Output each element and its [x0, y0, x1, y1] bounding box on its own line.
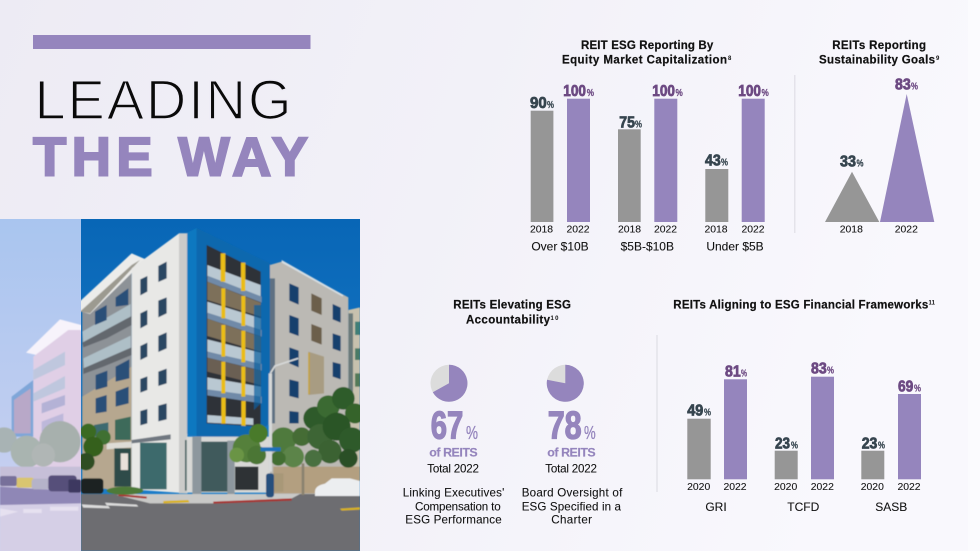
category labels: [531, 240, 764, 254]
year labels: 2020: [687, 482, 710, 493]
pie: 78 percent: [547, 365, 584, 402]
main photo: [72, 219, 365, 551]
value labels: 100: [738, 83, 761, 100]
far right building: [348, 307, 360, 497]
balcony floors: [207, 265, 262, 425]
text: compensation: Compensation to: [415, 501, 501, 514]
value labels: %: [635, 119, 642, 130]
text: board oversight: [522, 487, 623, 527]
car: white: [315, 478, 360, 496]
heading: [562, 40, 732, 67]
value labels: 23: [775, 435, 790, 452]
heading: REITs Aligning to ESG Financial Frameworks: [673, 299, 928, 311]
category labels: SASB: [875, 500, 907, 514]
value labels: [530, 83, 769, 170]
category labels: $5B-$10B: [621, 240, 674, 254]
year labels: 2018: [704, 225, 728, 236]
value labels: 33: [840, 154, 856, 171]
year labels: 2020: [774, 482, 797, 493]
heading: Accountability: [466, 315, 551, 327]
heading: REIT ESG Reporting By: [581, 40, 714, 52]
accent bar: [33, 35, 310, 49]
value labels: 83: [811, 361, 827, 378]
heading: Sustainability Goals: [819, 55, 935, 67]
trees: [77, 387, 365, 470]
heading: 11: [928, 300, 936, 306]
white tower: [132, 233, 187, 493]
right grey building: [270, 262, 348, 497]
category labels: TCFD: [787, 500, 820, 514]
heading: 8: [728, 56, 732, 62]
chart: REIT ESG reporting by market cap: [530, 40, 769, 254]
triangle: 2022: [880, 94, 934, 222]
ground floor: [187, 437, 270, 493]
value labels: 100: [652, 83, 675, 100]
value labels: 43: [705, 153, 721, 170]
category labels: GRI: [705, 500, 727, 514]
value labels: 75: [619, 114, 635, 131]
value labels: %: [911, 81, 918, 92]
title: the way: THE WAY: [33, 127, 308, 188]
person: [266, 473, 274, 497]
year labels: 2018: [530, 225, 553, 236]
text: board oversight: Board Oversight of: [522, 487, 623, 500]
value labels: %: [856, 159, 864, 170]
stat: 78 percent: [545, 405, 597, 476]
value labels: %: [704, 408, 711, 419]
title: leading: LEADING: [34, 68, 292, 131]
text: compensation: ESG Performance: [405, 514, 502, 527]
pie: 67 percent: [430, 365, 468, 402]
year labels: 2022: [723, 482, 747, 493]
stat: 78 percent: Total 2022: [545, 463, 597, 476]
stat: 78 percent: of REITS: [547, 446, 596, 460]
tinted left photo strip: [0, 219, 87, 551]
stat: 67 percent: %: [466, 423, 478, 443]
heading: REITs Elevating ESG: [453, 300, 571, 312]
text: compensation: [403, 487, 504, 527]
value labels: %: [914, 384, 921, 395]
street: [81, 494, 360, 551]
value labels: 83: [895, 76, 911, 93]
heading: 10: [550, 316, 559, 322]
stat: 67 percent: 67: [431, 405, 463, 448]
category labels: Over $10B: [531, 240, 589, 254]
year labels: 2022: [895, 225, 918, 236]
value labels: [840, 76, 918, 171]
stat: 67 percent: of REITS: [429, 446, 478, 460]
value labels: %: [676, 88, 683, 99]
text: compensation: Linking Executives': [403, 487, 504, 500]
stat: 78 percent: %: [584, 423, 596, 443]
photo: apartment building: [0, 219, 365, 551]
value labels: 49: [687, 403, 703, 420]
triangle: 2018: [825, 172, 879, 222]
value labels: 100: [563, 83, 586, 100]
chart: sustainability goals: [819, 40, 940, 236]
year labels: 2022: [811, 482, 834, 493]
blue block: [187, 228, 270, 437]
value labels: %: [741, 369, 747, 380]
heading: [819, 40, 940, 67]
chart: ESG financial frameworks: [673, 299, 936, 514]
stat: 78 percent: 78: [548, 405, 582, 448]
year labels: 2022: [566, 225, 590, 236]
value labels: %: [791, 440, 798, 451]
text: board oversight: ESG Specified in a: [522, 501, 622, 514]
value labels: %: [827, 366, 834, 377]
sign: [121, 453, 128, 470]
value labels: 23: [862, 435, 877, 452]
year labels: [687, 482, 921, 493]
value labels: [687, 361, 921, 452]
year labels: 2018: [840, 225, 863, 236]
panel: ESG accountability: [403, 300, 623, 527]
heading: 9: [936, 56, 940, 62]
value labels: 69: [898, 379, 913, 396]
left balcony wing: [82, 267, 132, 493]
heading: [453, 300, 571, 327]
category labels: Under $5B: [706, 240, 764, 254]
lamp post: [261, 358, 298, 472]
value labels: %: [878, 440, 885, 451]
year labels: 2022: [897, 482, 921, 493]
heading: REITs Reporting: [832, 40, 926, 52]
bars: [687, 377, 921, 479]
year labels: 2022: [654, 225, 677, 236]
value labels: 81: [725, 364, 741, 381]
year labels: [530, 225, 765, 236]
value labels: %: [547, 100, 554, 111]
text: board oversight: Charter: [551, 514, 592, 527]
stat: 67 percent: Total 2022: [427, 463, 479, 476]
shrubs: [107, 487, 143, 495]
heading: Equity Market Capitalization: [562, 55, 727, 67]
year labels: 2022: [741, 225, 765, 236]
stat: 67 percent: [427, 405, 479, 476]
bars: [531, 99, 765, 222]
value labels: %: [762, 88, 769, 99]
category labels: [705, 500, 907, 514]
car: black: [81, 478, 103, 494]
value labels: 90: [530, 95, 547, 112]
year labels: [840, 225, 918, 236]
year labels: 2020: [861, 482, 884, 493]
value labels: %: [721, 158, 728, 169]
year labels: 2018: [618, 225, 641, 236]
value labels: %: [587, 88, 594, 99]
title block: [33, 35, 310, 188]
